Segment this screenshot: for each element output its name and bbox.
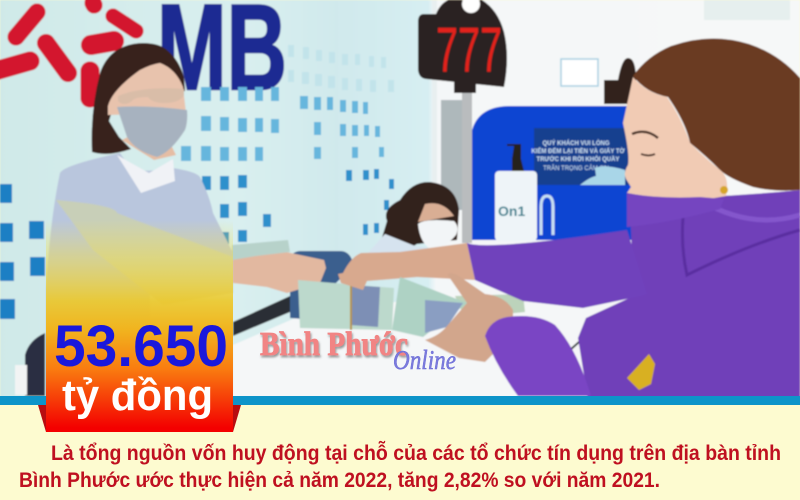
teller: glasses: [118, 88, 184, 104]
banner: gradient tab: [46, 220, 233, 432]
notice on glass: [534, 128, 630, 185]
right wall: notice frame: [561, 59, 598, 86]
dark chair left: [25, 333, 45, 396]
stat unit: tỷ đồng: [62, 371, 213, 420]
customer: arm and fingers: [338, 243, 475, 290]
teller: collar: [117, 155, 175, 193]
teller: shirt: [46, 152, 232, 396]
queue display with red digits: 777: [436, 14, 502, 86]
counter dark edge: [233, 296, 290, 336]
watermark: Online: Online: [393, 345, 456, 375]
banner ribbon wings: [38, 405, 241, 432]
customer: hoodie lower sleeve: [485, 316, 591, 396]
customer: face: [623, 77, 727, 203]
photo: bank counter scene: QUÝ KHÁCH VUI LÒNG: [542, 139, 610, 147]
blue glass panel: [470, 106, 635, 240]
pole: [462, 88, 472, 243]
description text: Bình Phước ước thực hiện cả năm 2022, tăng 2,82% so với năm 2021.: [19, 469, 660, 492]
stat value: 53.650: [54, 314, 228, 379]
customer: hoodie upper arm: [467, 230, 647, 308]
pen holder: [541, 196, 553, 235]
logo: MB star: [0, 3, 136, 98]
customer: fist: [425, 273, 513, 362]
hand sanitizer bottle: [495, 144, 537, 241]
photo: bank counter scene: TRÂN TRỌNG CẢM ƠN: [543, 165, 609, 172]
ceiling light: [704, 0, 790, 20]
watermark: Bình Phước: Bình Phước: [260, 326, 408, 363]
band: blue rule: [0, 396, 800, 405]
banknote held by customer: [392, 277, 467, 337]
wall pattern: blue squares: [181, 87, 384, 161]
back doorway panel: [441, 100, 463, 210]
customer: hair: [633, 38, 800, 191]
customer: collar cover: [627, 193, 724, 227]
teller: hand: [233, 252, 326, 293]
teller: mask: [117, 106, 187, 157]
small red counter sign: [604, 58, 636, 104]
teller: forearm: [56, 200, 234, 292]
second teller: [365, 182, 459, 262]
back wall: [0, 0, 800, 400]
banknote 500000: [298, 280, 394, 330]
hand sanitizer bottle: On1: [498, 203, 525, 219]
teller: hair: [92, 43, 185, 154]
customer: collar folds: [682, 200, 800, 275]
banknote in teller hand: [232, 240, 290, 260]
counter: [233, 290, 620, 400]
queue display with red digits: [418, 0, 507, 93]
banknote in background stack: [455, 294, 525, 318]
blue chair back: [290, 251, 353, 320]
teller: forehead: [108, 63, 186, 115]
teller: neck: [122, 137, 176, 160]
photo: bank counter scene: KIỂM ĐẾM LẠI TIỀN VÀ GIẤY TỜ: [531, 147, 626, 155]
teller figure: [46, 43, 233, 436]
customer: earring: [720, 186, 728, 194]
customer: hoodie body: [578, 190, 800, 400]
watermark: [260, 326, 456, 375]
description text: [19, 441, 781, 492]
hoodie badge: [627, 354, 655, 390]
photo: bank counter scene: TRƯỚC KHI RỜI KHỎI QUẦY: [537, 155, 619, 163]
